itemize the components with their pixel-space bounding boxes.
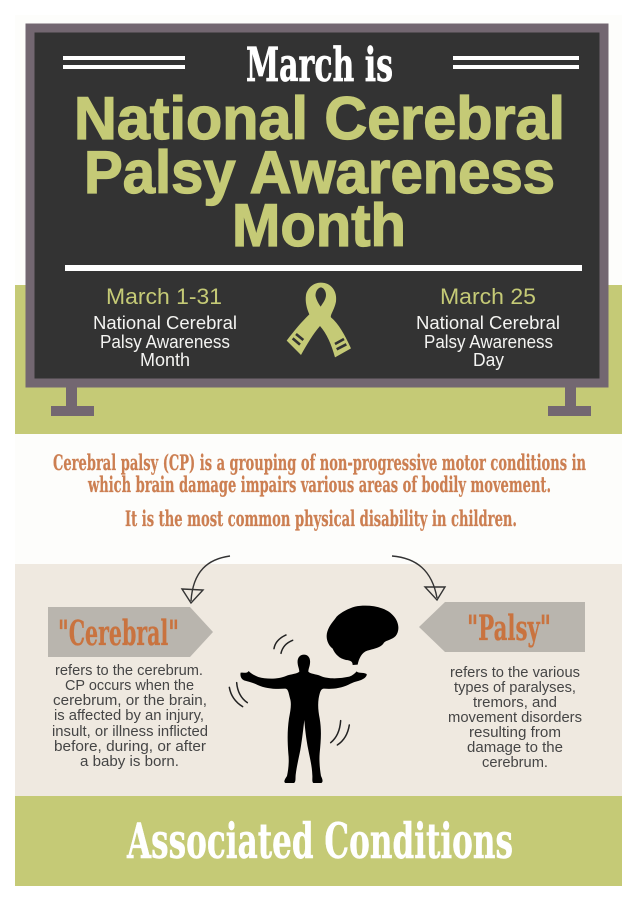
text block: Cerebral description: insult, or illness inflicted	[52, 723, 208, 740]
text block: Palsy description	[448, 664, 582, 771]
icon: motion lines	[229, 635, 349, 745]
text block: March 25: Day	[473, 350, 504, 370]
arrow: to Cerebral	[182, 556, 230, 603]
icon: brain	[327, 606, 398, 665]
panel: Associated Conditions	[15, 796, 622, 886]
icon: person silhouette	[240, 655, 367, 783]
panel: explanation	[15, 564, 622, 796]
icon: person with brain	[229, 606, 398, 783]
text block: Cerebral description	[52, 662, 208, 770]
title: Palsy Awareness	[84, 139, 555, 206]
text block: Palsy description: refers to the various	[450, 664, 580, 681]
icon: awareness ribbon	[287, 283, 351, 357]
callout: Palsy	[419, 602, 585, 652]
text block: March 1-31: Palsy Awareness	[100, 332, 230, 352]
title: National Cerebral	[74, 85, 565, 152]
billboard legs	[51, 386, 591, 416]
text block: March 1-31: Month	[140, 350, 190, 370]
title	[74, 85, 565, 259]
text block: Cerebral description: cerebrum, or the brain,	[53, 692, 207, 709]
text block: Cerebral description: is affected by an injury,	[54, 707, 204, 724]
panel: billboard	[30, 28, 604, 416]
arrow: to Palsy	[392, 556, 445, 600]
text block: March 25: National Cerebral	[416, 313, 560, 333]
callout: Palsy: "Palsy"	[467, 608, 551, 649]
text block: definition	[53, 450, 586, 531]
text block: Palsy description: tremors, and	[473, 694, 557, 711]
text block: Palsy description: movement disorders	[448, 709, 582, 726]
text block: Cerebral description: a baby is born.	[80, 753, 179, 770]
text block: March 25	[416, 284, 560, 370]
callout: Cerebral	[48, 607, 213, 657]
text block: March 1-31: March 1-31	[106, 284, 222, 309]
text block: Cerebral description: before, during, or after	[54, 738, 206, 755]
heading: March is	[63, 38, 579, 93]
text block: March 1-31	[93, 284, 237, 370]
panel: billboard backdrop	[15, 285, 622, 434]
text block: March 25: March 25	[440, 284, 536, 309]
text block: Palsy description: resulting from	[469, 724, 561, 741]
text block: March 25: Palsy Awareness	[424, 332, 553, 352]
title: Month	[232, 192, 406, 259]
heading: March is: March is	[246, 38, 393, 93]
text block: Palsy description: types of paralyses,	[454, 679, 576, 696]
text block: Cerebral description: CP occurs when the	[65, 677, 194, 694]
billboard screen	[30, 28, 604, 383]
text block: March 1-31: National Cerebral	[93, 313, 237, 333]
text block: Palsy description: damage to the	[467, 739, 563, 756]
callout: Cerebral: "Cerebral"	[58, 613, 179, 654]
text block: Cerebral description: refers to the cerebrum.	[55, 662, 203, 679]
text block: Palsy description: cerebrum.	[482, 754, 548, 771]
